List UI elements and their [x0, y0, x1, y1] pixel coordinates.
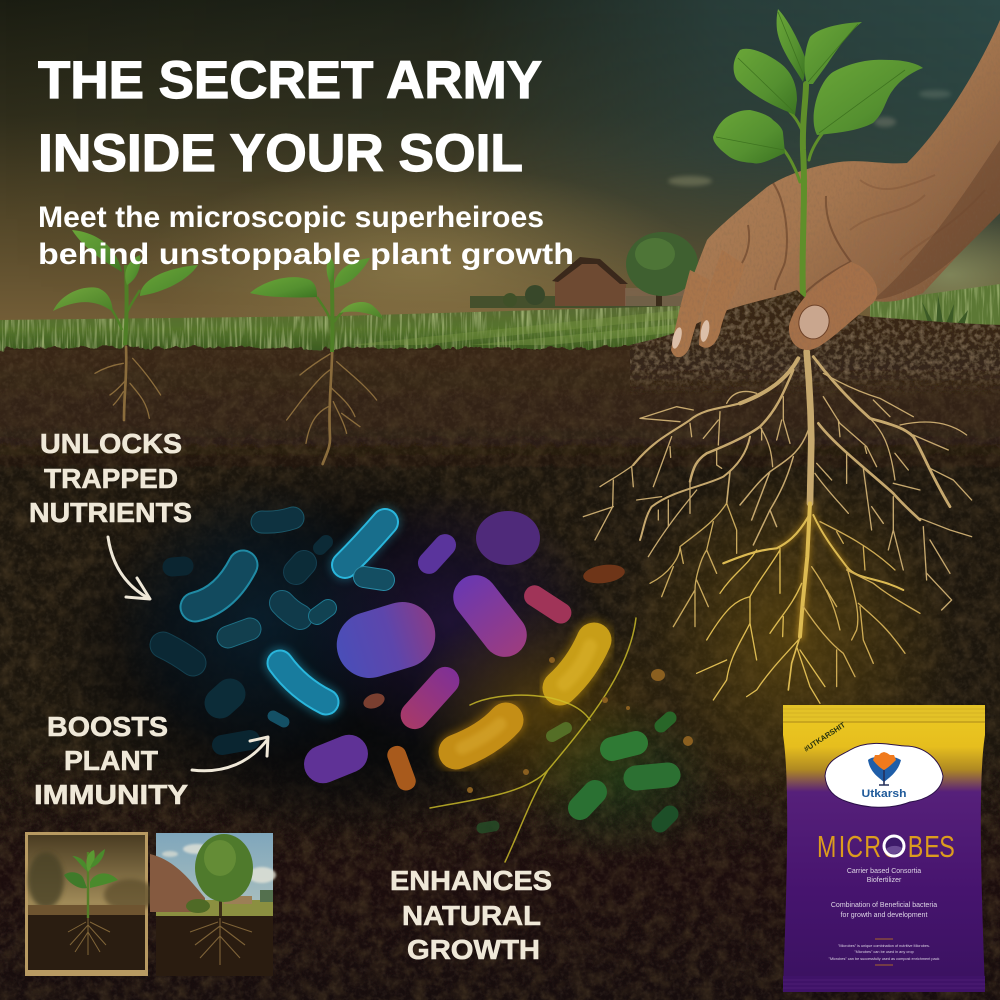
product descriptor: "Microbes" is unique combination of nutritive Microbes. — [838, 944, 930, 948]
callout: enhances natural growth: ENHANCES — [390, 865, 552, 896]
glow: dark pocket and microbe colony light — [50, 460, 960, 860]
upper roots — [583, 352, 972, 610]
callout: boosts plant immunity: BOOSTS — [47, 711, 168, 742]
heading — [38, 51, 542, 183]
small seedling left — [53, 230, 198, 420]
subheading: Meet the microscopic superheiroes — [38, 201, 544, 234]
soil mound under hand — [630, 290, 1000, 395]
background: grass field — [0, 284, 1000, 352]
bacterium: magenta — [395, 661, 465, 735]
heading: THE SECRET ARMY — [38, 51, 542, 110]
subheading: behind unstoppable plant growth — [38, 238, 574, 271]
bacterium: teal large — [195, 565, 243, 607]
callout: enhances natural growth: GROWTH — [407, 934, 540, 965]
background: soil cross-section — [0, 340, 1000, 1000]
callout: unlocks trapped nutrients: UNLOCKS — [40, 428, 182, 459]
product pack — [783, 705, 985, 992]
product descriptor: Carrier based Consortia — [847, 868, 921, 875]
logo cloud — [825, 743, 943, 807]
callout: enhances natural growth: NATURAL — [402, 900, 541, 931]
microbes: green group — [482, 718, 670, 828]
root glow — [777, 503, 847, 637]
lower roots — [650, 503, 920, 703]
product descriptor: "Microbes" can be used in any crop — [854, 950, 914, 954]
microbes: yellow group — [430, 618, 636, 862]
logo flower — [868, 752, 901, 785]
main plant leaves — [713, 9, 923, 163]
product descriptor: Biofertilizer — [867, 877, 902, 884]
logo wordmark: Utkarsh — [862, 788, 907, 800]
main plant stem — [784, 84, 822, 295]
brand name O ring — [884, 836, 904, 856]
callout: boosts plant immunity — [34, 711, 188, 810]
product descriptor: "Microbes" can be successfully used as compost enrichment pack — [829, 957, 939, 961]
bacterium: bright upper — [345, 522, 385, 565]
callout: enhances natural growth — [390, 865, 552, 965]
brand name: MICROBES — [817, 829, 955, 864]
bacterium: brown — [582, 562, 626, 586]
bacterium: upper violet — [476, 511, 540, 565]
farmer's hand — [672, 20, 1000, 358]
plant roots with glow — [583, 352, 972, 703]
hashtag: #UTKARSHIT — [802, 720, 847, 754]
callout: unlocks trapped nutrients: NUTRIENTS — [29, 497, 192, 528]
product descriptor — [829, 868, 939, 961]
bacterium: pink — [520, 581, 575, 627]
product descriptor: for growth and development — [841, 912, 927, 919]
heading: INSIDE YOUR SOIL — [38, 124, 523, 183]
callout: unlocks trapped nutrients: TRAPPED — [44, 463, 178, 494]
pack body — [783, 707, 985, 990]
callout: boosts plant immunity: IMMUNITY — [34, 779, 188, 810]
subheading — [38, 201, 574, 271]
thumbnail: grown tree — [150, 833, 276, 976]
callout: boosts plant immunity: PLANT — [64, 745, 158, 776]
bacterium: lower violet — [298, 729, 374, 789]
arrow to lower microbes — [192, 737, 268, 771]
background: distant farm with barn and trees — [470, 232, 710, 308]
bacterium: mid purple — [444, 566, 536, 666]
small seedling middle — [250, 256, 383, 464]
top crimp — [783, 705, 985, 722]
microbes: blue group — [163, 518, 385, 745]
hand fingers and thumb — [670, 250, 877, 357]
bacterium: large violet — [329, 594, 443, 686]
background: sky — [0, 0, 1000, 320]
thumbnail: framed seedling — [25, 832, 156, 976]
microbes: nutrient specks — [467, 657, 693, 793]
bacterium: small violet — [413, 530, 461, 578]
bacterium: bright lower — [280, 663, 326, 702]
bottom crimp — [783, 976, 985, 992]
callout: unlocks trapped nutrients — [29, 428, 192, 528]
microbes: purple group — [298, 511, 626, 793]
arrow to blue microbes — [108, 537, 150, 599]
product descriptor: Combination of Beneficial bacteria — [831, 902, 937, 909]
bacterium: orange — [385, 743, 418, 793]
bacteria: dim blue cluster — [262, 518, 293, 522]
